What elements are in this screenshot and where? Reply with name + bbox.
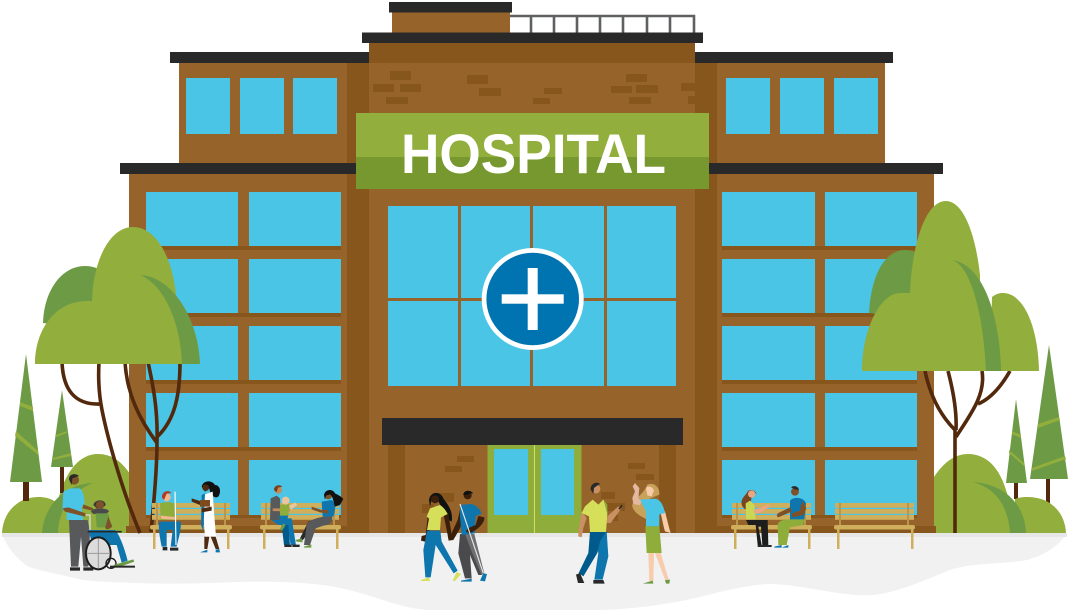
bench 4 [834,503,915,549]
center tower [347,32,717,533]
entrance pillars [388,445,676,533]
lower right wing [695,174,936,533]
building [120,2,943,533]
man walking with phone [576,483,623,584]
icon: medical cross [482,248,584,350]
lower left wing [126,174,369,533]
father holding child [269,485,300,547]
sign text: HOSPITAL [401,122,666,185]
entrance doors [488,445,582,533]
doctor [192,481,220,552]
upper bricks [373,71,695,104]
couple: woman walking [421,493,461,581]
lower left roof [120,163,360,174]
seated woman bench 2 [295,490,343,548]
left pine trees [10,354,73,501]
person in wheelchair [86,500,135,569]
seated man bench 3 [774,486,806,548]
person pushing wheelchair [62,474,93,571]
ground [2,533,1067,610]
penthouse [389,2,694,33]
bench 2 [260,503,341,549]
right tree [862,201,1039,533]
left bushes [2,454,130,533]
central window [388,206,676,386]
seated person with cane [159,491,181,551]
right pine trees [1006,345,1068,503]
hospital sign [356,113,709,189]
right bushes [934,454,1066,533]
upper right wing [695,52,893,164]
child [280,503,289,517]
couple: man with white cane [448,491,487,582]
upper left wing [170,52,369,164]
lower bricks [422,456,654,521]
entrance canopy [382,418,683,445]
bench 1 [150,503,232,549]
seated woman bench 3 [741,490,772,547]
bench 3 [731,503,812,549]
wheelchair wheels [86,537,111,569]
woman waving [632,483,671,584]
lower right roof [704,163,943,174]
left tree [35,227,200,533]
